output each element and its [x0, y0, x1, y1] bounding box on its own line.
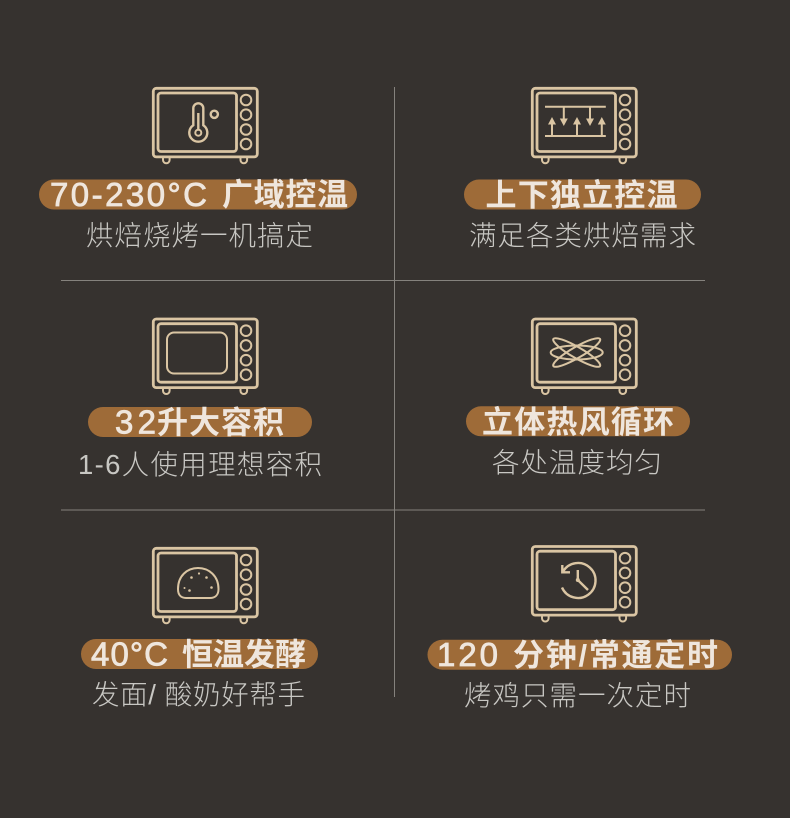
icon: oven with heat arrows	[532, 88, 636, 163]
subtitle: 各处温度均匀	[492, 447, 662, 478]
heading pill: 120 分钟/常通定时: 分钟/常通定时	[513, 638, 718, 673]
panel: 3D hot air circulation	[466, 319, 690, 478]
heading pill: 32升大容积	[88, 404, 312, 440]
heading pill: 40°C 恒温发酵: 恒温发酵	[182, 638, 306, 672]
heading pill: 120 分钟/常通定时	[428, 636, 732, 673]
subtitle: 烘焙烧烤一机搞定	[86, 220, 313, 251]
icon: oven with clock	[532, 546, 636, 621]
heading pill: 40°C 恒温发酵	[81, 636, 318, 672]
panel: 32 litre capacity	[78, 319, 322, 480]
subtitle: 发面/ 酸奶好帮手	[92, 679, 305, 710]
heading pill: 70-230°C 广域控温: 广域控温	[222, 178, 348, 212]
panel: 120 minute timer	[428, 546, 732, 711]
subtitle: 满足各类烘焙需求	[469, 220, 696, 251]
panel: independent upper and lower control	[464, 88, 701, 251]
panel: 40°C fermentation	[81, 548, 318, 710]
icon: oven with thermometer	[153, 88, 257, 163]
heading pill: 32升大容积: 32	[115, 404, 156, 440]
heading pill: 上下独立控温: 上下独立控温	[486, 178, 678, 213]
icon: oven with convection orbits	[532, 319, 636, 394]
subtitle: 1-6人使用理想容积	[78, 449, 322, 480]
subtitle: 烤鸡只需一次定时	[464, 680, 691, 711]
heading pill: 70-230°C 广域控温: 70-230°C	[50, 176, 207, 213]
panel: wide temperature range	[39, 88, 357, 251]
heading pill: 70-230°C 广域控温	[39, 176, 357, 213]
icon: oven with dough	[153, 548, 257, 623]
heading pill: 立体热风循环: 立体热风循环	[482, 405, 674, 440]
icon: oven with large cavity	[153, 319, 257, 394]
heading pill: 120 分钟/常通定时: 120	[437, 636, 498, 673]
heading pill: 40°C 恒温发酵: 40°C	[91, 636, 168, 672]
heading pill: 32升大容积: 升大容积	[157, 406, 284, 440]
